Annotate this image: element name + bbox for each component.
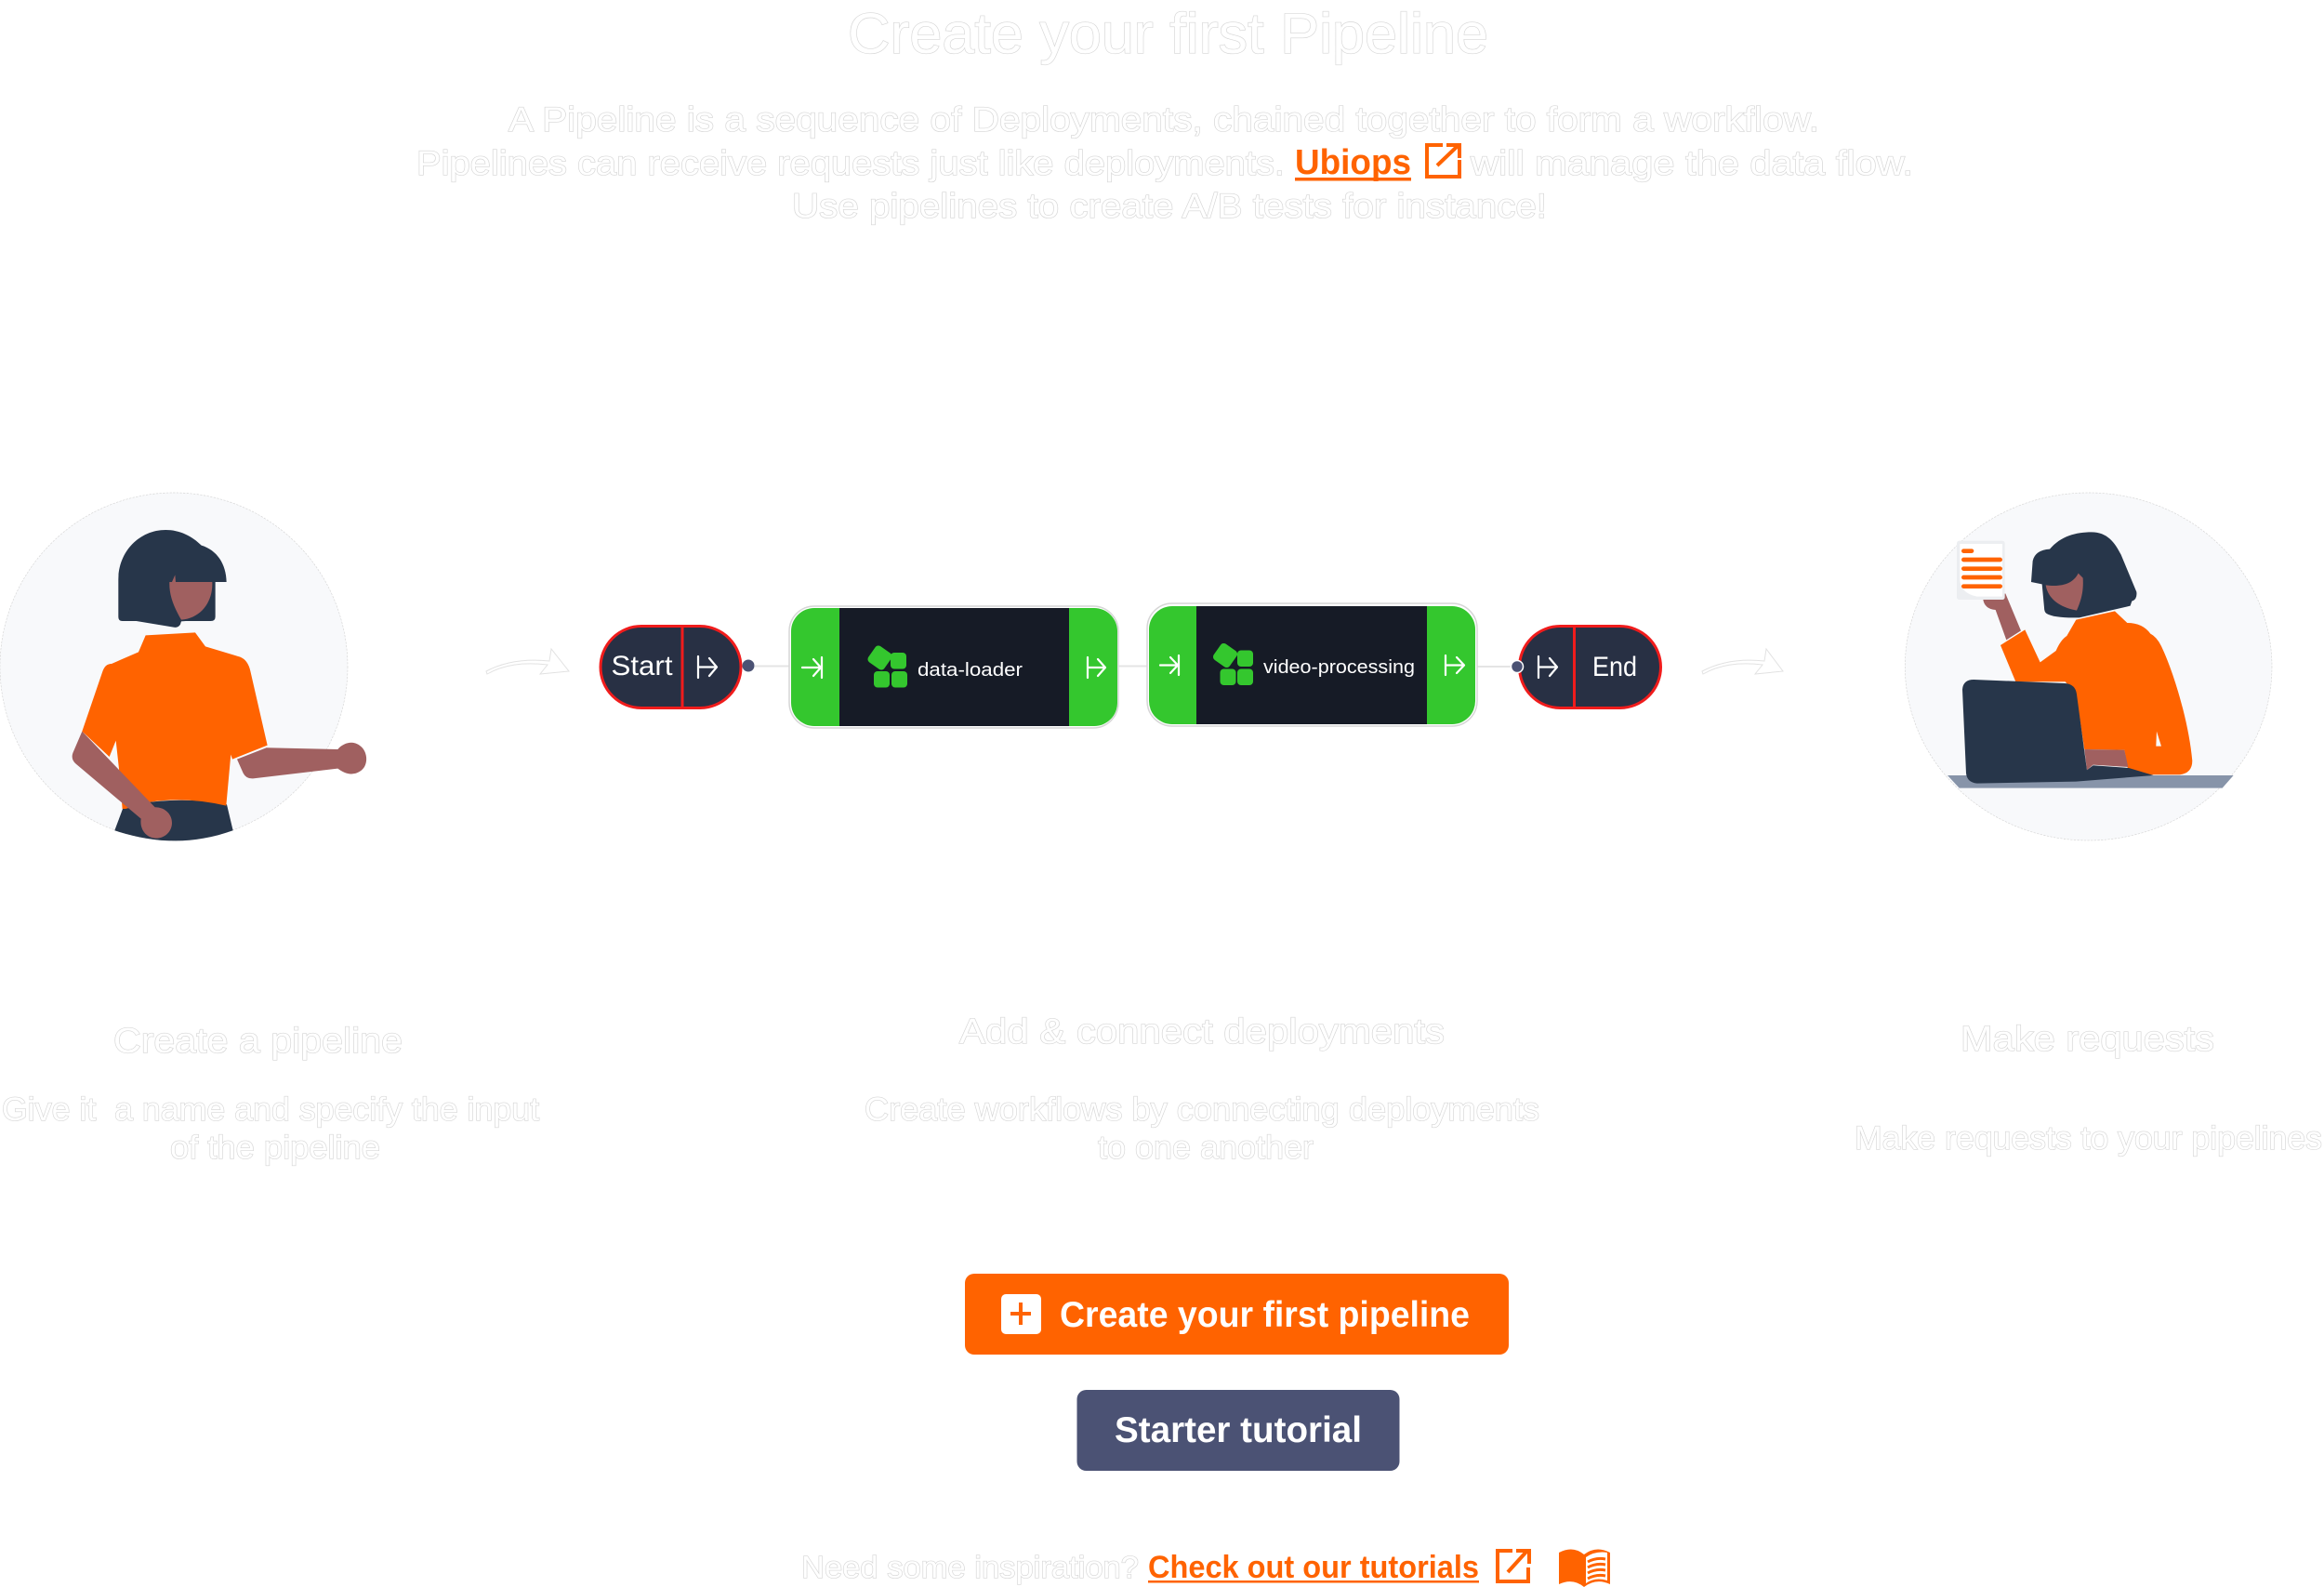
step: create a pipeline: Create a pipeline: [113, 1022, 403, 1061]
extended arm: [237, 743, 366, 778]
intro text block: A Pipeline is a sequence of Deployments, chained together to form a workflow.: [508, 100, 1819, 139]
node: End: End: [1592, 652, 1637, 682]
step: add and connect deployments: to one another: [1098, 1130, 1314, 1166]
icon: output port: [1088, 657, 1105, 678]
intro text block: Use pipelines to create A/B tests for instance!: [792, 187, 1547, 225]
sweater: [2000, 611, 2192, 774]
face: [2046, 574, 2083, 611]
raised forearm and hand: [1983, 593, 2021, 640]
icon: deployment logo: [866, 644, 907, 688]
arrow: out of pipeline: [1702, 649, 1783, 674]
icon: external link: [1427, 145, 1459, 177]
arrow: into pipeline: [486, 649, 569, 674]
icon: plus: [1001, 1294, 1041, 1334]
button: create your first pipeline: Create your first pipeline: [1060, 1295, 1470, 1335]
intro text block: will manage the data flow.: [1470, 144, 1913, 182]
table: [1948, 775, 2234, 788]
shirt: [82, 632, 268, 809]
bent arm: [73, 732, 172, 839]
node: data-loader: [789, 606, 1118, 728]
link: Ubiops: Ubiops: [1295, 143, 1411, 182]
button: starter tutorial: [1076, 1390, 1400, 1471]
port dot: [1512, 660, 1523, 673]
node: data-loader: data-loader: [918, 660, 1023, 681]
intro text block: [416, 100, 1913, 225]
node: Start: [601, 626, 741, 708]
step: create a pipeline: of the pipeline: [170, 1130, 380, 1166]
icon: book: [1559, 1549, 1610, 1587]
step: make requests: Make requests to your pipelines: [1855, 1120, 2322, 1157]
forearm on table: [2084, 749, 2128, 770]
title: Create your first Pipeline: [848, 2, 1488, 65]
illustration: woman with laptop: [1905, 493, 2272, 840]
illustration: woman pointing: [0, 493, 366, 840]
trousers: [114, 800, 233, 840]
step: add and connect deployments: Create workflows by connecting deployments: [865, 1091, 1539, 1128]
step: make requests: Make requests: [1961, 1020, 2214, 1059]
footer text: Need some inspiration?: [801, 1550, 1139, 1584]
icon: input port: [802, 657, 822, 678]
node: Start: Start: [612, 651, 673, 681]
step: create a pipeline: Give it a name and specify the input: [2, 1091, 539, 1128]
document: [1957, 541, 2005, 600]
hair: [2031, 532, 2136, 617]
node: End: [1519, 626, 1660, 708]
button: create your first pipeline: [965, 1274, 1509, 1355]
port dot: [742, 660, 755, 671]
laptop: [1962, 680, 2154, 784]
pipeline diagram: [601, 603, 1660, 728]
hair: [118, 530, 227, 628]
step: make requests: [1855, 1020, 2322, 1157]
button: starter tutorial: Starter tutorial: [1115, 1410, 1362, 1450]
connectors: [755, 666, 1512, 668]
icon: external link: [1498, 1551, 1529, 1581]
icon: deployment logo: [1211, 641, 1253, 685]
node: video-processing: [1147, 603, 1477, 726]
icon: output port: [1446, 655, 1464, 675]
node: video-processing: video-processing: [1263, 657, 1415, 678]
step: add and connect deployments: [865, 1012, 1539, 1166]
step: create a pipeline: [2, 1022, 539, 1166]
link: check out our tutorials: Check out our tutorials: [1148, 1550, 1479, 1585]
face: [169, 575, 212, 620]
icon: input port: [1160, 655, 1179, 675]
intro text block: Pipelines can receive requests just like deployments.: [416, 144, 1285, 182]
step: add and connect deployments: Add & connect deployments: [959, 1012, 1445, 1051]
